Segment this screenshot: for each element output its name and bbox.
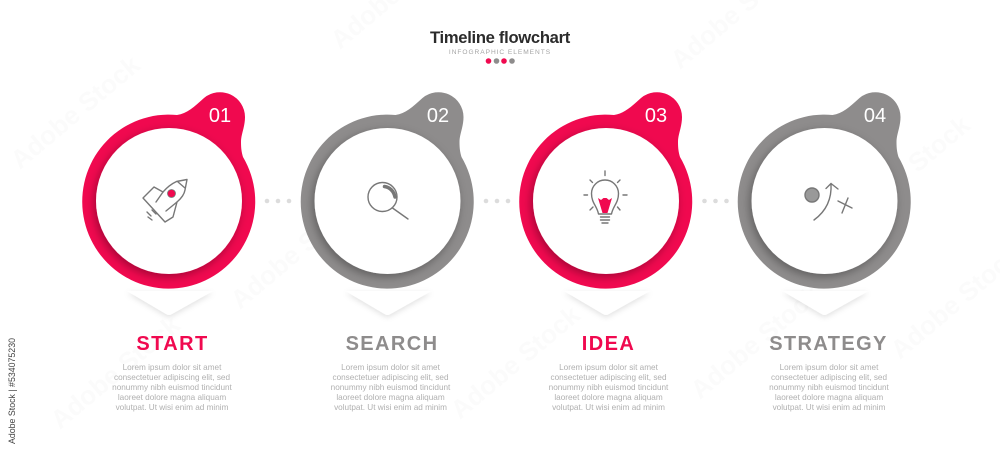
body text: laoreet dolore magna aliquam bbox=[554, 393, 663, 402]
connector dots 3 bbox=[702, 199, 729, 203]
body text: laoreet dolore magna aliquam bbox=[336, 393, 445, 402]
body text: Lorem ipsum dolor sit amet bbox=[341, 363, 441, 372]
body text: laoreet dolore magna aliquam bbox=[118, 393, 226, 402]
body text: Lorem ipsum dolor sit amet bbox=[780, 363, 879, 372]
stock id: Adobe Stock | #534075230 bbox=[7, 338, 17, 444]
body text bbox=[549, 363, 669, 412]
body text: consectetuer adipiscing elit, sed bbox=[114, 373, 230, 382]
white disc bbox=[533, 128, 679, 274]
number: 03 bbox=[645, 105, 667, 127]
step 1: start bbox=[82, 92, 255, 412]
connector dots 2 bbox=[484, 199, 510, 203]
red ring bbox=[82, 92, 255, 289]
grey ring bbox=[301, 92, 474, 289]
number: 01 bbox=[209, 105, 231, 127]
body text: nonummy nibh euismod tincidunt bbox=[112, 383, 233, 392]
chevron bbox=[127, 291, 213, 315]
title: Timeline flowchart bbox=[430, 28, 571, 47]
body text bbox=[112, 363, 233, 412]
body text: volutpat. Ut wisi enim ad minim bbox=[773, 403, 886, 412]
connector dots 1 bbox=[265, 199, 291, 203]
heading: STRATEGY bbox=[769, 333, 888, 355]
body text: Lorem ipsum dolor sit amet bbox=[559, 363, 659, 372]
watermark: Adobe Stock bbox=[835, 109, 976, 235]
icon: light bulb bbox=[584, 171, 627, 223]
red ring bbox=[519, 92, 692, 289]
grey ring bbox=[738, 92, 911, 289]
step 2: search bbox=[301, 92, 474, 412]
number: 02 bbox=[427, 105, 449, 127]
subtitle: INFOGRAPHIC ELEMENTS bbox=[449, 49, 551, 56]
body text: laoreet dolore magna aliquam bbox=[775, 393, 883, 402]
title bbox=[430, 28, 571, 56]
icon: strategy play bbox=[805, 184, 852, 220]
body text bbox=[331, 363, 451, 412]
body text: volutpat. Ut wisi enim ad minim bbox=[116, 403, 229, 412]
body text: nonummy nibh euismod tincidunt bbox=[331, 383, 451, 392]
heading: IDEA bbox=[582, 333, 635, 355]
heading: START bbox=[136, 333, 209, 355]
chevron bbox=[564, 291, 650, 315]
icon: rocket bbox=[143, 180, 187, 222]
title dots bbox=[486, 58, 515, 64]
body text: Lorem ipsum dolor sit amet bbox=[123, 363, 222, 372]
watermark: Adobe Stock bbox=[445, 299, 586, 425]
white disc bbox=[96, 128, 242, 274]
heading: SEARCH bbox=[346, 333, 438, 355]
body text bbox=[769, 363, 890, 412]
white disc bbox=[314, 128, 460, 274]
body text: consectetuer adipiscing elit, sed bbox=[332, 373, 449, 382]
body text: nonummy nibh euismod tincidunt bbox=[549, 383, 669, 392]
step 3: idea bbox=[519, 92, 692, 412]
chevron bbox=[782, 291, 868, 315]
watermark: Adobe Stock bbox=[225, 189, 366, 315]
white disc bbox=[752, 128, 898, 274]
body text: consectetuer adipiscing elit, sed bbox=[550, 373, 667, 382]
step 4: strategy bbox=[738, 92, 911, 412]
watermark: Adobe Stock bbox=[45, 309, 186, 435]
icon: magnifier bbox=[368, 182, 408, 219]
body text: volutpat. Ut wisi enim ad minim bbox=[334, 403, 447, 412]
body text: volutpat. Ut wisi enim ad minim bbox=[552, 403, 665, 412]
number: 04 bbox=[864, 105, 886, 127]
chevron bbox=[346, 291, 432, 315]
body text: nonummy nibh euismod tincidunt bbox=[769, 383, 890, 392]
watermark: Adobe Stock bbox=[5, 49, 146, 175]
watermark: Adobe Stock bbox=[685, 279, 826, 405]
body text: consectetuer adipiscing elit, sed bbox=[771, 373, 887, 382]
